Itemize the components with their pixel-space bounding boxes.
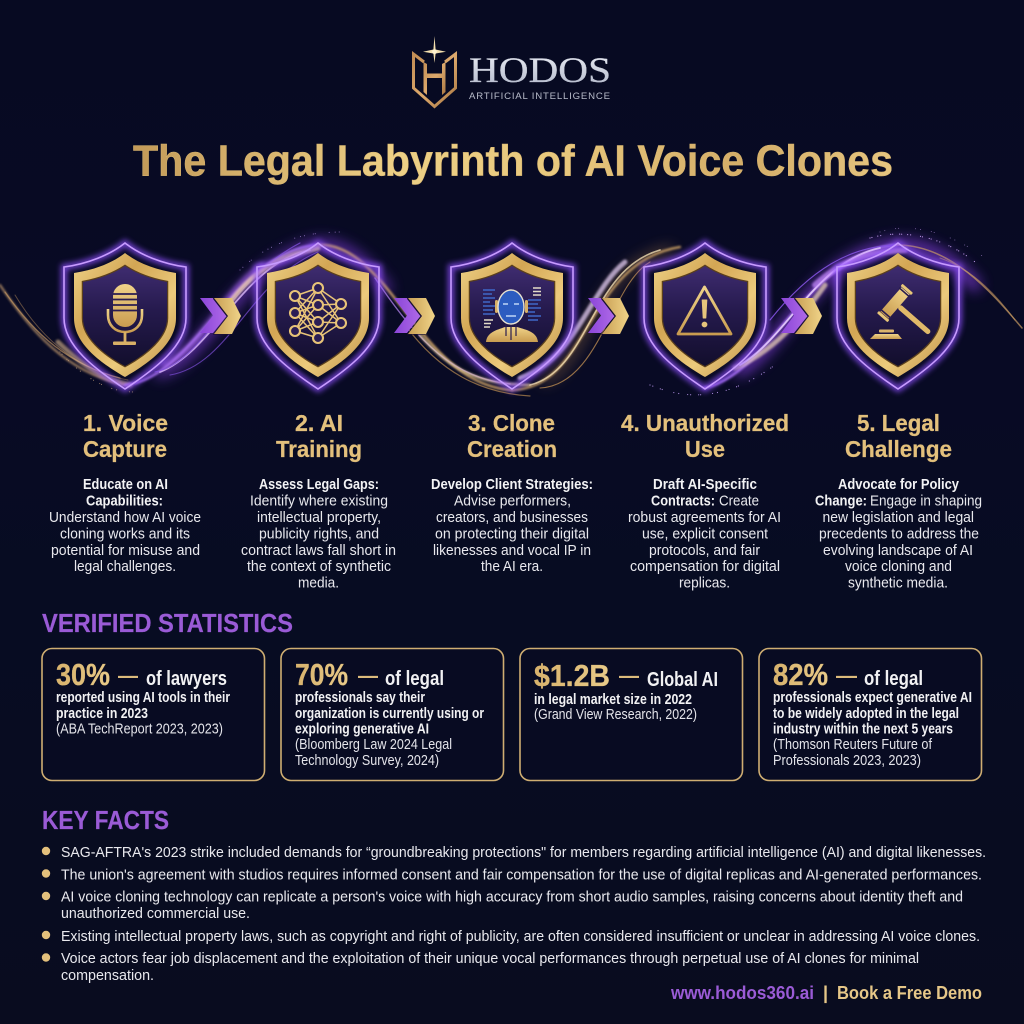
step 2 shield: neural network	[257, 243, 379, 389]
left gold tail	[0, 285, 125, 385]
footer call to action: Book a Free Demo	[837, 983, 982, 1003]
stat card: 82% of legal professionals: to be widely adopted in the legal	[773, 705, 959, 722]
step 5 description: new legislation and legal	[822, 509, 974, 526]
step 5 heading: Challenge	[845, 436, 952, 462]
step 2 description: publicity rights, and	[259, 526, 379, 542]
step 3 heading	[467, 410, 557, 462]
stat card: 70% of legal professionals: —	[358, 656, 378, 692]
stat card: 82% of legal professionals: (Thomson Reuters Future of	[773, 736, 933, 753]
step 4 description: Contracts:	[651, 492, 715, 510]
ribbon 2 to 3	[318, 245, 512, 390]
brand tagline: ARTIFICIAL INTELLIGENCE	[469, 91, 610, 102]
step 1 heading	[83, 410, 168, 462]
step 2 text	[241, 410, 396, 592]
step 3 description: creators, and businesses	[436, 509, 588, 526]
stat card: 30% of lawyers: (ABA TechReport 2023, 2023)	[56, 720, 223, 738]
fact 4: Existing intellectual property laws, such as copyright and right of publicity, are often considered insufficient or unclear in addressing AI voice clones.	[61, 928, 980, 945]
arrow: step 3 to 4	[588, 298, 629, 335]
ribbon 1 to 2	[125, 245, 318, 385]
footer call to action	[670, 983, 982, 1003]
step 4 text	[621, 410, 789, 592]
stat card: 30% of lawyers: practice in 2023	[56, 705, 148, 722]
stat card: $1.2B global AI in legal: (Grand View Research, 2022)	[534, 706, 697, 723]
stat card: 70% of legal professionals: exploring generative AI	[295, 720, 429, 738]
step 3 text	[431, 410, 593, 575]
fact 5: compensation.	[61, 967, 154, 984]
fact 2: The union's agreement with studios requires informed consent and fair compensation for the use of digital replicas and AI-generated performances.	[61, 866, 982, 884]
icon: H shield with star	[414, 36, 456, 106]
stat card: 82% of legal professionals: Professionals 2023, 2023)	[773, 752, 921, 769]
step 2 description: contract laws fall short in	[241, 542, 396, 559]
icon: neural network	[290, 283, 346, 343]
step 4 description: replicas.	[679, 574, 730, 592]
step 5 text	[815, 410, 982, 592]
step 2 heading	[276, 410, 362, 462]
stat card: 30% of lawyers	[42, 648, 264, 780]
step 4 description: Create	[719, 492, 759, 510]
arrow: step 1 to 2	[200, 298, 241, 335]
step 4 heading: 4. Unauthorized	[621, 410, 789, 436]
stat card: $1.2B global AI in legal: $1.2B	[534, 658, 610, 693]
ribbon 4 to 5	[704, 245, 897, 388]
step 3 heading: 3. Clone	[468, 410, 555, 436]
fact 3	[42, 888, 963, 922]
fact 5	[42, 950, 919, 984]
step 3 description: on protecting their digital	[435, 526, 589, 542]
step 1 description: potential for misuse and	[51, 542, 200, 559]
step 3 heading: Creation	[467, 436, 557, 462]
step 2 description: the context of synthetic	[247, 558, 391, 575]
step 1 description: cloning works and its	[60, 526, 190, 542]
step 4 heading	[621, 410, 789, 462]
step 4 description	[628, 476, 781, 592]
step 1 heading: Capture	[83, 436, 167, 462]
step 1 heading: 1. Voice	[83, 410, 168, 436]
step 2 description: Identify where existing	[250, 492, 388, 510]
step 5 shield: gavel	[837, 243, 959, 389]
step 1 description: Capabilities:	[86, 492, 163, 510]
stat card: 82% of legal professionals: of legal	[864, 668, 923, 690]
step 4 shield: warning	[644, 243, 766, 389]
step 1 description: Educate on AI	[83, 476, 168, 493]
title: The Legal Labyrinth of AI Voice Clones	[133, 136, 893, 186]
step 2 description: intellectual property,	[257, 509, 381, 526]
brand name: HODOS	[469, 50, 611, 90]
icon: robot with data panels	[483, 288, 541, 342]
step 3 description: likenesses and vocal IP in	[433, 542, 591, 559]
step 5 description: evolving landscape of AI	[823, 542, 973, 559]
stat card: 70% of legal professionals: Technology Survey, 2024)	[295, 752, 439, 769]
stat card: 70% of legal professionals: (Bloomberg Law 2024 Legal	[295, 736, 452, 753]
heading: key facts: KEY FACTS	[42, 805, 169, 835]
icon: warning triangle	[678, 287, 731, 334]
step 1 description: legal challenges.	[74, 558, 176, 575]
step 5 heading: 5. Legal	[857, 410, 940, 436]
step 1 description	[49, 476, 201, 575]
particles	[60, 352, 135, 392]
stat card: 82% of legal professionals: professionals expect generative AI	[773, 689, 972, 706]
step 4 description: compensation for digital	[630, 558, 780, 575]
step 2 heading: Training	[276, 436, 362, 462]
step 5 description: synthetic media.	[848, 574, 948, 592]
arrow: step 4 to 5	[781, 298, 822, 335]
stat card: 82% of legal professionals: —	[836, 656, 857, 692]
step 3 description	[431, 476, 593, 575]
step 4 description: robust agreements for AI	[628, 509, 781, 526]
stat card: 30% of lawyers: reported using AI tools in their	[56, 689, 230, 706]
stat card: 82% of legal professionals: industry within the next 5 years	[773, 720, 953, 738]
icon: microphone	[108, 284, 142, 345]
footer call to action: www.hodos360.ai	[670, 983, 814, 1003]
stat card: 82% of legal professionals	[759, 648, 982, 780]
step 1 text	[49, 410, 201, 575]
step 1 shield: microphone	[64, 243, 186, 389]
right tail	[897, 245, 1022, 328]
stat card: 30% of lawyers: of lawyers	[146, 668, 227, 690]
ribbon 3 to 4	[512, 247, 680, 390]
flowing wave ribbons	[0, 228, 1022, 396]
fact 5: Voice actors fear job displacement and the exploitation of their unique vocal performances through perpetual use of AI clones for minimal	[61, 950, 919, 967]
step 5 heading	[845, 410, 952, 462]
fact 3: AI voice cloning technology can replicate a person's voice with high accuracy from short audio samples, raising concerns about identity theft and	[61, 888, 963, 906]
step 1 description: Understand how AI voice	[49, 509, 201, 526]
step 3 description: Advise performers,	[454, 492, 571, 510]
stat card: $1.2B global AI in legal	[520, 648, 742, 780]
stat card: 70% of legal professionals: organization is currently using or	[295, 705, 484, 722]
fact 3: unauthorized commercial use.	[61, 905, 250, 922]
step 3 shield: AI robot head	[451, 243, 573, 389]
stat card: 70% of legal professionals: professionals say their	[295, 689, 425, 706]
logo: Hodos Artificial Intelligence	[414, 36, 611, 106]
stat card: $1.2B global AI in legal: in legal market size in 2022	[534, 691, 692, 708]
stat card: 30% of lawyers: 30%	[56, 657, 110, 692]
icon: gavel	[870, 284, 943, 348]
step 5 description: voice cloning and	[845, 558, 952, 575]
stat card: $1.2B global AI in legal: —	[619, 656, 639, 692]
step 4 heading: Use	[685, 436, 725, 462]
step 4 description: use, explicit consent	[642, 526, 769, 542]
step 5 description: Advocate for Policy	[838, 476, 960, 493]
step 4 description: protocols, and fair	[649, 542, 760, 559]
step 5 description: precedents to address the	[819, 526, 979, 542]
step 4 description: Draft AI-Specific	[653, 476, 757, 493]
footer call to action: |	[823, 983, 828, 1003]
step 5 description: Engage in shaping	[870, 492, 982, 510]
step 5 description: Change:	[815, 492, 867, 510]
step 5 description	[815, 476, 982, 592]
key facts list	[42, 844, 986, 984]
stat card: 70% of legal professionals: 70%	[295, 657, 348, 692]
stat card: 30% of lawyers: —	[118, 656, 138, 692]
stat card: 70% of legal professionals	[281, 648, 504, 780]
step 3 description: the AI era.	[481, 558, 543, 575]
step 2 heading: 2. AI	[295, 410, 343, 436]
stat card: $1.2B global AI in legal: Global AI	[647, 669, 718, 691]
step 3 description: Develop Client Strategies:	[431, 476, 593, 493]
stat card: 82% of legal professionals: 82%	[773, 657, 828, 692]
heading: verified statistics: VERIFIED STATISTICS	[42, 608, 293, 638]
stat card: 70% of legal professionals: of legal	[385, 668, 444, 690]
step 2 description: media.	[298, 574, 339, 592]
step 2 description	[241, 476, 396, 592]
arrow: step 2 to 3	[394, 298, 435, 335]
step 2 description: Assess Legal Gaps:	[259, 476, 379, 493]
